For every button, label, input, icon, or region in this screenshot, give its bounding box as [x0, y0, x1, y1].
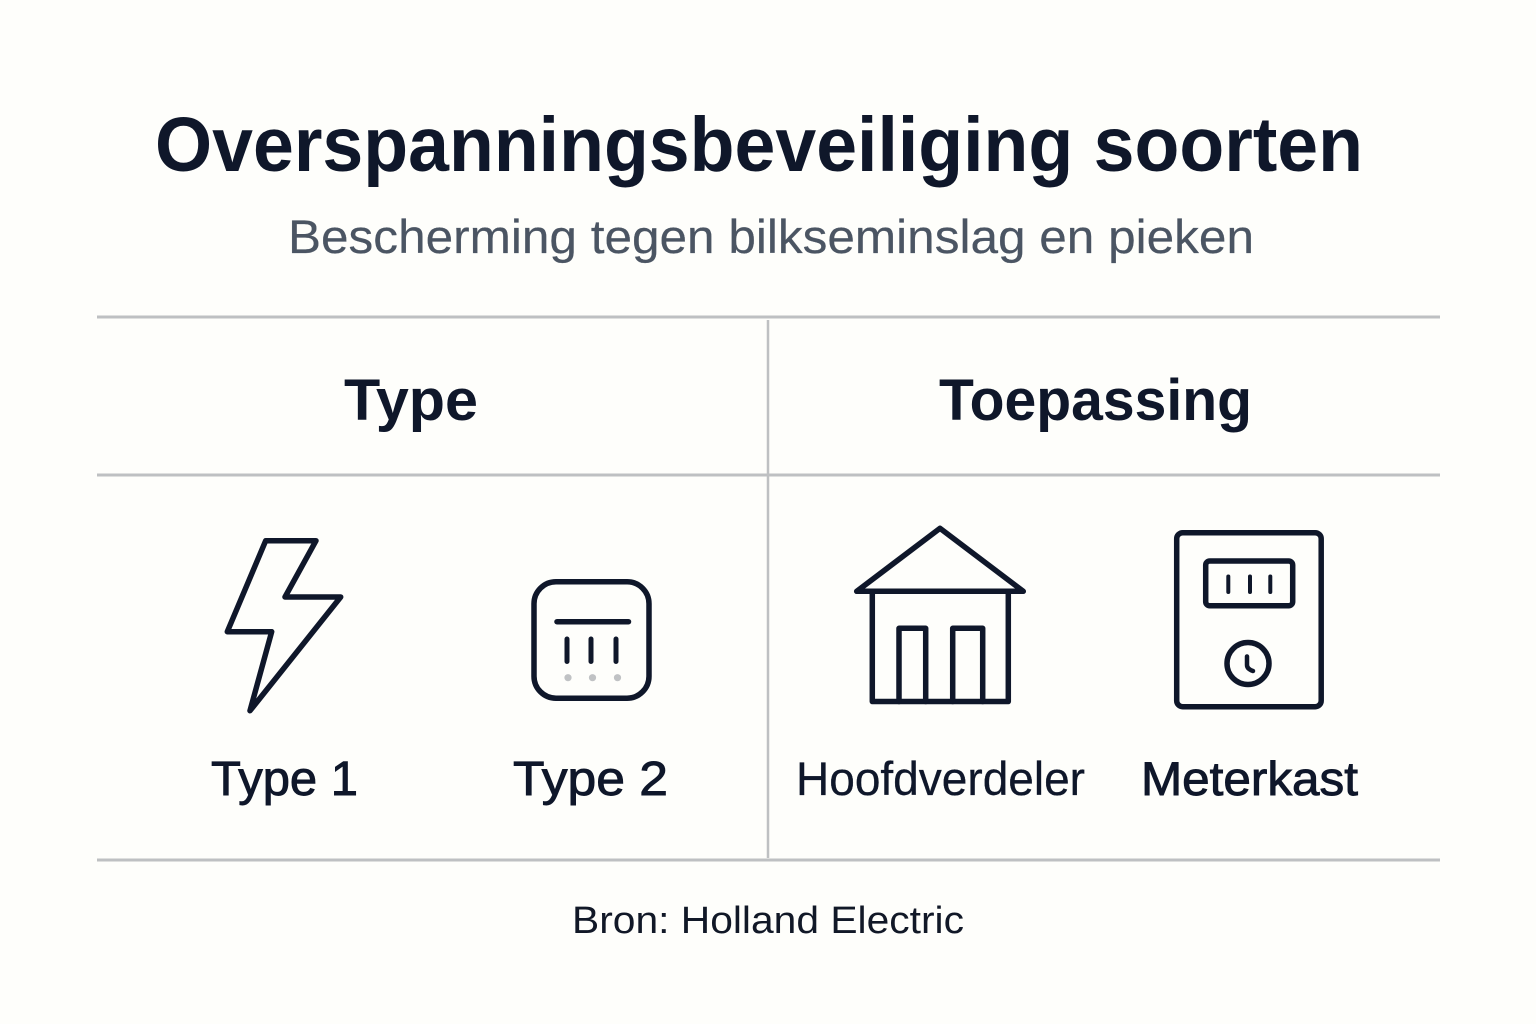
- column heading: Type: Type: [344, 368, 478, 433]
- column heading: Toepassing: Toepassing: [939, 368, 1252, 433]
- label: Meterkast: Meterkast: [1141, 752, 1358, 805]
- subtitle: Bescherming tegen bilkseminslag en pieken: [288, 210, 1254, 263]
- source note: Bron: Holland Electric: [572, 900, 964, 942]
- icon: lightning bolt: [227, 541, 341, 711]
- icon: meter cabinet: [1177, 533, 1321, 707]
- icon: house: [857, 528, 1023, 702]
- icon: surge protection module: [534, 582, 649, 698]
- label: Type 1: Type 1: [211, 753, 358, 806]
- label: Type 2: Type 2: [513, 753, 668, 806]
- title: Overspanningsbeveiliging soorten: [155, 102, 1363, 188]
- label: Hoofdverdeler: Hoofdverdeler: [796, 752, 1085, 805]
